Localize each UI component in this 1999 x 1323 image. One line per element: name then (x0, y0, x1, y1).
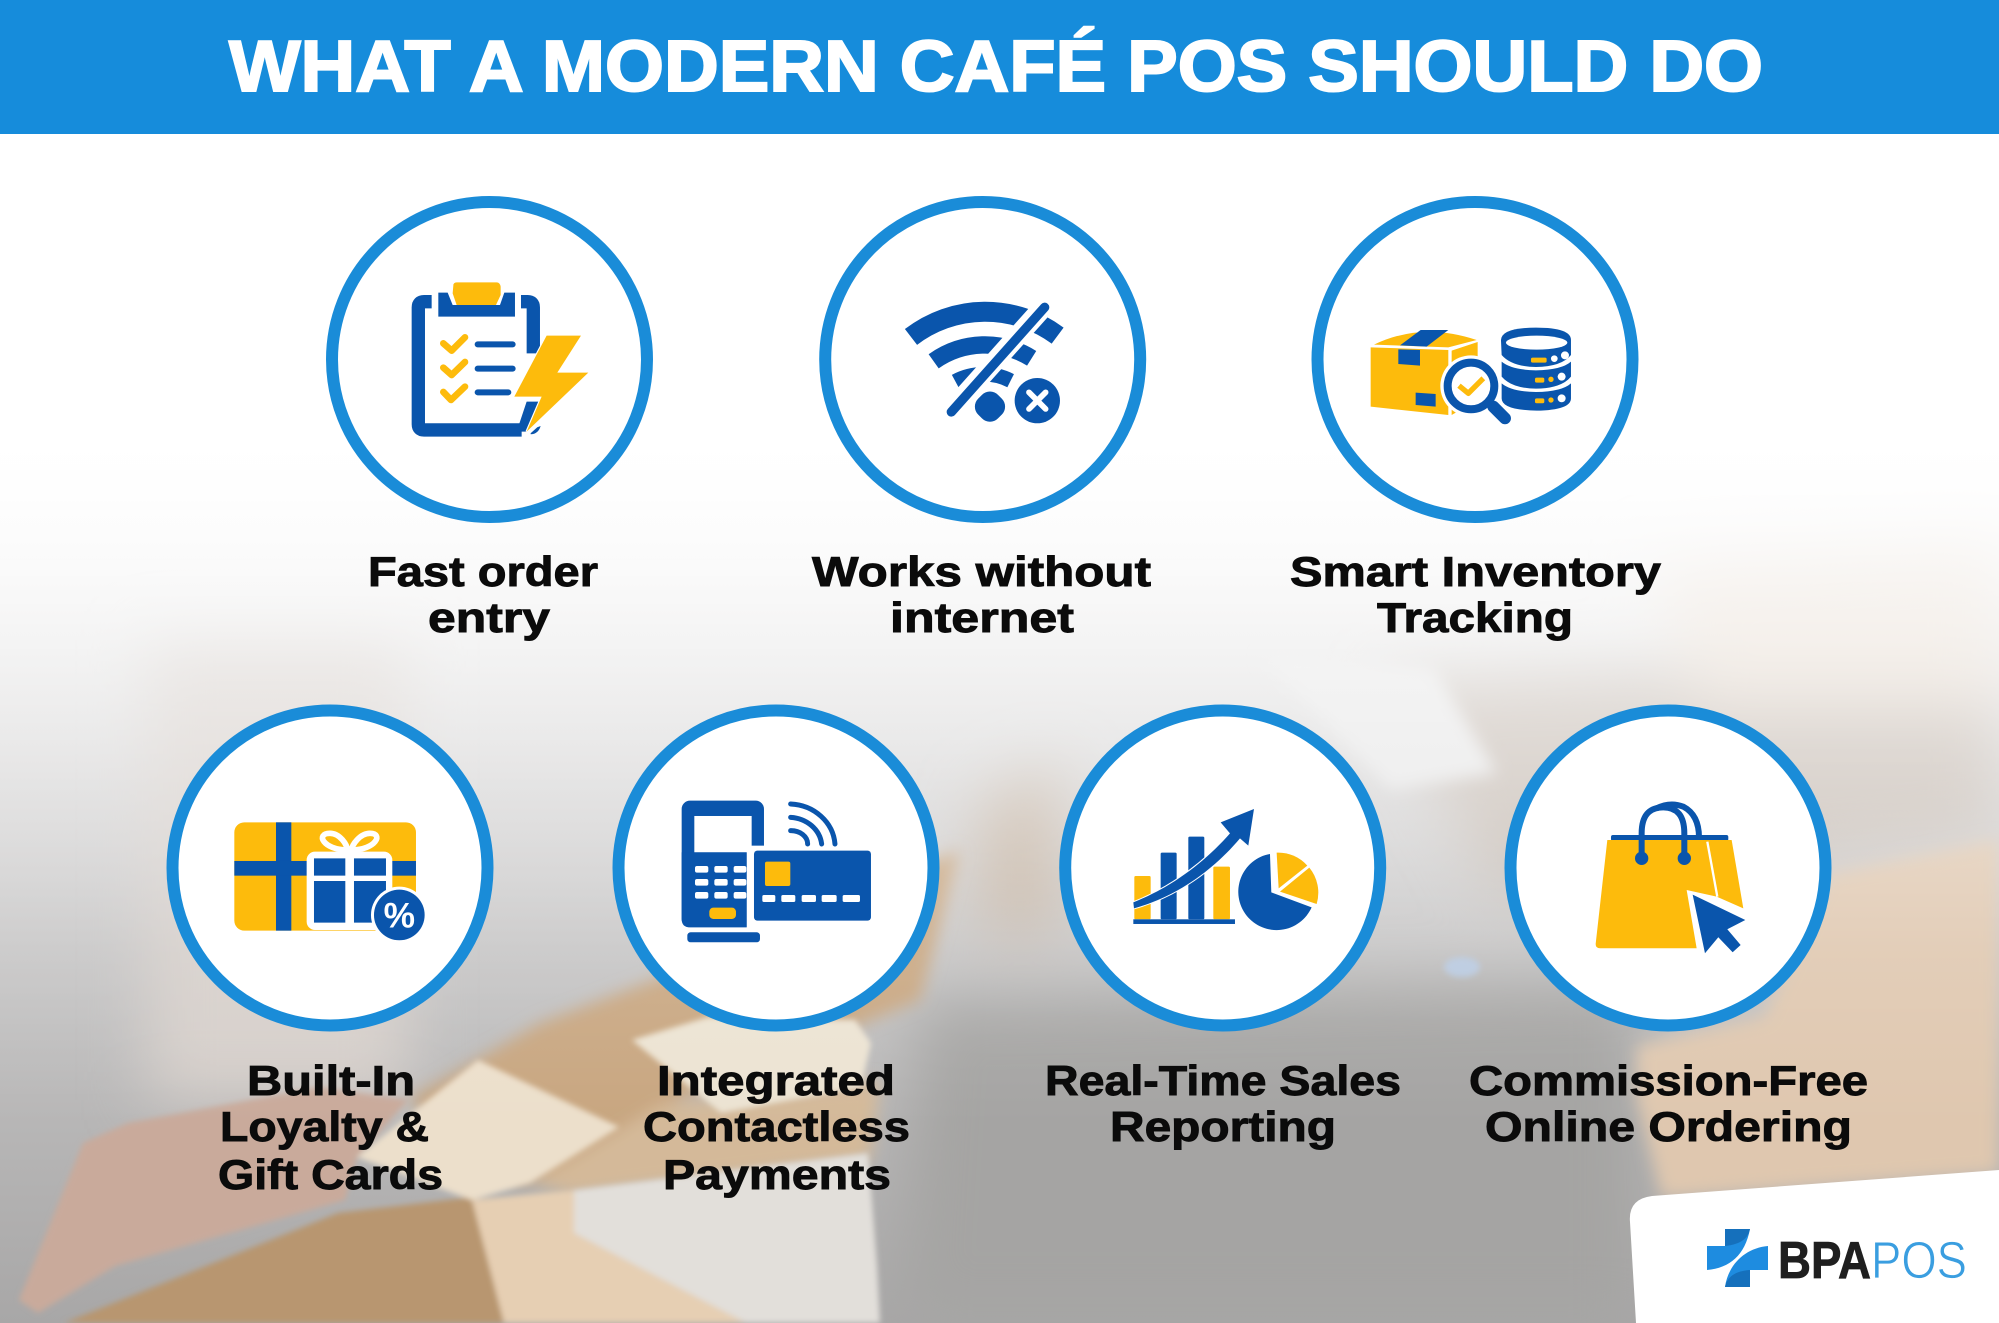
panel: works without internet (812, 202, 1151, 641)
header banner (0, 0, 1999, 134)
label: commission-free online ordering: Commission-Free (1469, 1057, 1868, 1104)
label: commission-free online ordering (1469, 1057, 1868, 1150)
logo wordmark: BPA (1778, 1232, 1871, 1290)
label: smart inventory tracking: Smart Inventory (1290, 548, 1662, 595)
icon: wifi off (911, 303, 1063, 427)
label: works without internet (812, 548, 1151, 641)
panel: smart inventory tracking (1290, 202, 1662, 641)
label: works without internet: Works without (812, 548, 1151, 595)
icon: clipboard with lightning (418, 282, 588, 434)
label: integrated contactless payments: Integrated (657, 1057, 895, 1104)
label: integrated contactless payments: Contactless (643, 1103, 910, 1150)
panel: commission-free online ordering (1469, 710, 1868, 1150)
label: fast order entry (368, 548, 598, 641)
logo wordmark: POS (1871, 1232, 1967, 1290)
icon: gift card (234, 822, 428, 943)
logo card (1630, 1170, 1999, 1323)
panel: loyalty and gift cards (172, 710, 488, 1198)
icon: box, magnifier and database (1371, 328, 1571, 418)
label: smart inventory tracking: Tracking (1377, 594, 1573, 641)
label: built-in loyalty and gift cards: Gift Cards (218, 1151, 443, 1198)
label: fast order entry: entry (428, 594, 551, 641)
label: commission-free online ordering: Online Ordering (1485, 1103, 1852, 1150)
panel: real-time sales reporting (1045, 710, 1401, 1150)
label: real-time sales reporting (1045, 1057, 1401, 1150)
icon: BPA POS cross (1707, 1229, 1768, 1287)
label: built-in loyalty and gift cards: Built-In (247, 1057, 415, 1104)
logo wordmark (1778, 1232, 1967, 1290)
panel: fast order entry (332, 202, 647, 641)
label: real-time sales reporting: Real-Time Sales (1045, 1057, 1401, 1104)
panel: contactless payments (618, 710, 934, 1198)
label: fast order entry: Fast order (368, 548, 598, 595)
icon: card terminal (682, 801, 873, 942)
label: real-time sales reporting: Reporting (1110, 1103, 1336, 1150)
label: works without internet: internet (890, 594, 1074, 641)
icon: chart and pie (1133, 809, 1318, 930)
label: integrated contactless payments (643, 1057, 910, 1198)
title: WHAT A MODERN CAFÉ POS SHOULD DO (229, 27, 1763, 107)
label: integrated contactless payments: Payments (663, 1151, 891, 1198)
label: built-in loyalty and gift cards: Loyalty & (220, 1103, 429, 1150)
label: built-in loyalty and gift cards (218, 1057, 443, 1198)
icon: shopping bag and cursor (1596, 805, 1745, 953)
label: smart inventory tracking (1290, 548, 1662, 641)
icon: gift card: % (384, 897, 415, 936)
